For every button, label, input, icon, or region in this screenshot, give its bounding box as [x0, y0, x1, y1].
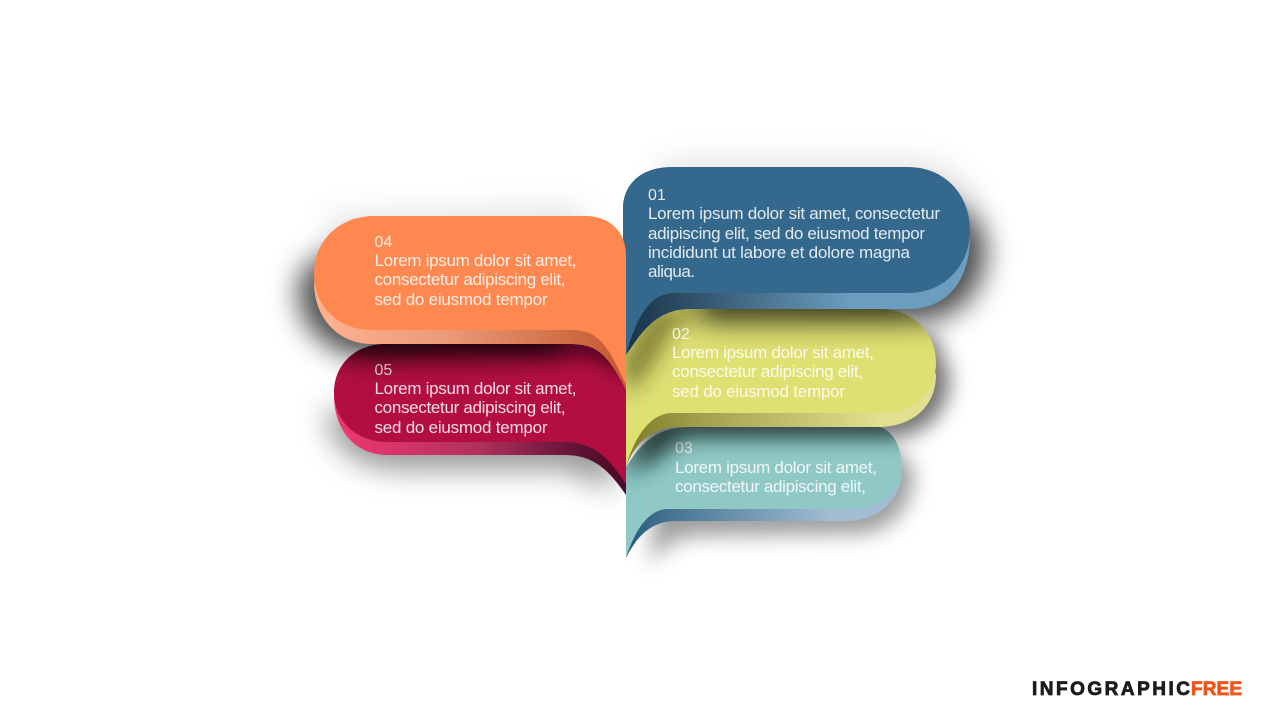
text: 01: adipiscing elit, sed do eiusmod tempor — [648, 224, 925, 243]
logo: InfographicFree wordmark: FREE — [1191, 679, 1242, 700]
text: 01 — [648, 187, 940, 281]
text: 04: consectetur adipiscing elit, — [374, 270, 566, 289]
text: 05: consectetur adipiscing elit, — [374, 398, 566, 417]
text: 02: 02 — [672, 326, 690, 343]
text: 03: 03 — [675, 440, 693, 457]
text: 05: sed do eiusmod tempor — [374, 418, 548, 437]
text: 03 — [675, 440, 877, 496]
text: 05: Lorem ipsum dolor sit amet, — [374, 379, 576, 398]
panel: 01 blue speech bubble — [623, 160, 986, 355]
panel: 05 crimson speech bubble — [326, 330, 640, 495]
text: 04: sed do eiusmod tempor — [374, 290, 548, 309]
text: 04: Lorem ipsum dolor sit amet, — [374, 251, 576, 270]
text: 02 — [672, 326, 874, 401]
panel: 03 teal speech bubble — [620, 413, 914, 568]
text: 01: 01 — [648, 187, 666, 204]
text: 01: aliqua. — [648, 262, 695, 281]
text: 02: sed do eiusmod tempor — [672, 382, 845, 401]
text: 02: Lorem ipsum dolor sit amet, — [672, 343, 874, 362]
text: 03: Lorem ipsum dolor sit amet, — [675, 458, 877, 477]
panel: 04 orange speech bubble — [298, 205, 626, 390]
logo: InfographicFree wordmark: INFOGRAPHIC — [1032, 679, 1190, 700]
text: 01: incididunt ut labore et dolore magna — [648, 243, 911, 262]
text: 01: Lorem ipsum dolor sit amet, consectetur — [648, 204, 940, 223]
text: 05 — [374, 362, 576, 437]
text: 05: 05 — [374, 362, 392, 379]
text: 02: consectetur adipiscing elit, — [672, 362, 863, 381]
text: 04 — [374, 234, 576, 309]
panel: 02 yellow speech bubble — [620, 300, 950, 470]
text: 04: 04 — [374, 234, 392, 251]
text: 03: consectetur adipiscing elit, — [675, 477, 866, 496]
